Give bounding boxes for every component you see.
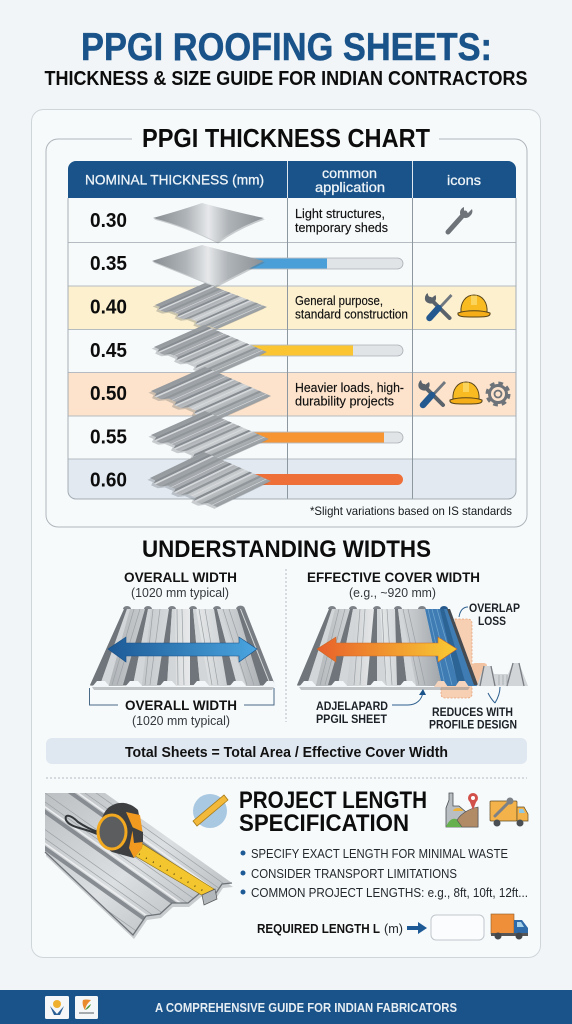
callout: sheet label: PPGIL SHEET <box>316 712 388 726</box>
application text: General purpose, <box>295 293 383 308</box>
icon: site location <box>446 793 478 827</box>
right roofing sheet <box>297 606 470 690</box>
overlap blue section <box>425 606 478 687</box>
callout: sheet label: ADJELAPARD <box>316 699 388 713</box>
logo: bulb emblem <box>45 996 69 1019</box>
footer text: A COMPREHENSIVE GUIDE FOR INDIAN FABRICATORS <box>155 1001 457 1015</box>
thickness values: 0.60 <box>90 470 127 492</box>
application text: temporary sheds <box>295 220 388 235</box>
icon: tools 0.40 <box>425 293 452 318</box>
icon: hard hat 0.50 <box>450 382 482 404</box>
callout: profile design: PROFILE DESIGN <box>429 718 517 732</box>
heading: thickness chart: PPGI THICKNESS CHART <box>142 123 430 153</box>
icon: tools 0.50 <box>418 380 445 405</box>
formula bar <box>46 738 527 764</box>
effective cover width heading: EFFECTIVE COVER WIDTH <box>307 569 480 585</box>
overall width heading: OVERALL WIDTH <box>124 569 237 585</box>
thickness values: 0.35 <box>90 253 127 275</box>
panel: thickness chart <box>46 123 527 527</box>
bracket: overall width <box>90 688 274 705</box>
logo: flag emblem <box>75 996 98 1019</box>
callout: profile design: REDUCES WITH <box>432 705 513 719</box>
table header: icons <box>447 172 481 188</box>
bullet list <box>240 847 528 900</box>
bullet list: COMMON PROJECT LENGTHS: e.g., 8ft, 10ft, 12ft... <box>251 886 528 900</box>
effective cover width heading: (e.g., ~920 mm) <box>349 586 436 600</box>
thickness values: 0.50 <box>90 383 127 405</box>
corrugated sheet 0.55 <box>143 411 270 467</box>
tape strap <box>66 816 98 834</box>
corrugated sheet 0.40 <box>148 283 268 332</box>
heading: project length <box>239 787 427 837</box>
table header <box>68 161 516 198</box>
heading: understanding widths: UNDERSTANDING WIDTHS <box>142 536 431 563</box>
formula bar: Total Sheets = Total Area / Effective Cover Width <box>125 744 448 761</box>
effective cover width heading <box>307 569 480 600</box>
heading: project length: PROJECT LENGTH <box>239 787 427 814</box>
overall width label: OVERALL WIDTH <box>125 697 237 713</box>
thickness values: 0.40 <box>90 296 127 318</box>
table <box>68 161 516 511</box>
flat sheet 0.35 <box>152 245 265 288</box>
chart frame <box>46 139 527 527</box>
flat sheet 0.30 <box>153 203 265 244</box>
arrow: effective width <box>317 637 457 662</box>
tape body <box>101 803 143 858</box>
thickness values: 0.45 <box>90 340 127 362</box>
icon: truck with wrench <box>490 798 528 826</box>
application text <box>295 206 408 408</box>
input box <box>431 915 484 940</box>
required length label: (m) <box>384 921 403 936</box>
title: PPGI ROOFING SHEETS: <box>81 26 492 69</box>
application text: Heavier loads, high- <box>295 380 404 395</box>
application text: durability projects <box>295 394 394 408</box>
left roofing sheet <box>90 606 277 690</box>
callout: sheet label <box>316 689 426 726</box>
corrugated sheet 0.45 <box>147 325 268 377</box>
illustration: roof sheet with tape measure <box>44 793 233 939</box>
heading: project length: SPECIFICATION <box>239 810 409 837</box>
footnote: *Slight variations based on IS standards <box>310 504 512 518</box>
icon: hard hat 0.40 <box>458 295 490 317</box>
table header: common <box>322 165 377 181</box>
icon: ruler <box>193 794 228 828</box>
thickness values: 0.55 <box>90 426 127 448</box>
panel: understanding widths <box>46 536 528 764</box>
overall width label <box>125 697 237 728</box>
arrow: required length <box>407 922 427 934</box>
callout: overlap loss: OVERLAP <box>469 601 520 615</box>
callout: overlap loss <box>459 601 520 628</box>
footer band <box>0 990 572 1024</box>
icon: wrench <box>448 207 472 232</box>
overall width label: (1020 mm typical) <box>132 714 230 728</box>
panel: project length <box>44 791 528 940</box>
table header: NOMINAL THICKNESS (mm) <box>85 172 264 188</box>
overall width heading <box>124 569 237 600</box>
progress bars <box>240 258 403 485</box>
bullet list: SPECIFY EXACT LENGTH FOR MINIMAL WASTE <box>251 847 508 861</box>
table rows <box>68 198 516 499</box>
corrugated sheet 0.50 <box>143 367 272 424</box>
application text: standard construction <box>295 306 408 322</box>
title: THICKNESS & SIZE GUIDE FOR INDIAN CONTRACTORS <box>44 68 528 90</box>
thickness values: 0.30 <box>90 210 127 232</box>
callout: overlap loss: LOSS <box>478 614 506 628</box>
corrugated sheet 0.60 <box>142 452 272 511</box>
title <box>44 26 528 90</box>
callout: profile design <box>429 687 517 732</box>
tape hook <box>202 889 217 905</box>
icon: gear <box>488 384 508 404</box>
table header: application <box>315 179 385 195</box>
required length label: REQUIRED LENGTH L <box>257 921 380 936</box>
arrow: overall width <box>108 637 257 662</box>
small profile sheet <box>477 663 528 686</box>
overall width heading: (1020 mm typical) <box>131 586 229 600</box>
main panel <box>32 110 540 958</box>
overlap zone <box>441 619 487 698</box>
icon: delivery truck <box>491 914 528 940</box>
tape blade <box>130 843 214 897</box>
bullet list: CONSIDER TRANSPORT LIMITATIONS <box>251 867 457 881</box>
application text: Light structures, <box>295 206 385 221</box>
divider <box>285 569 287 722</box>
thickness values <box>90 210 127 492</box>
